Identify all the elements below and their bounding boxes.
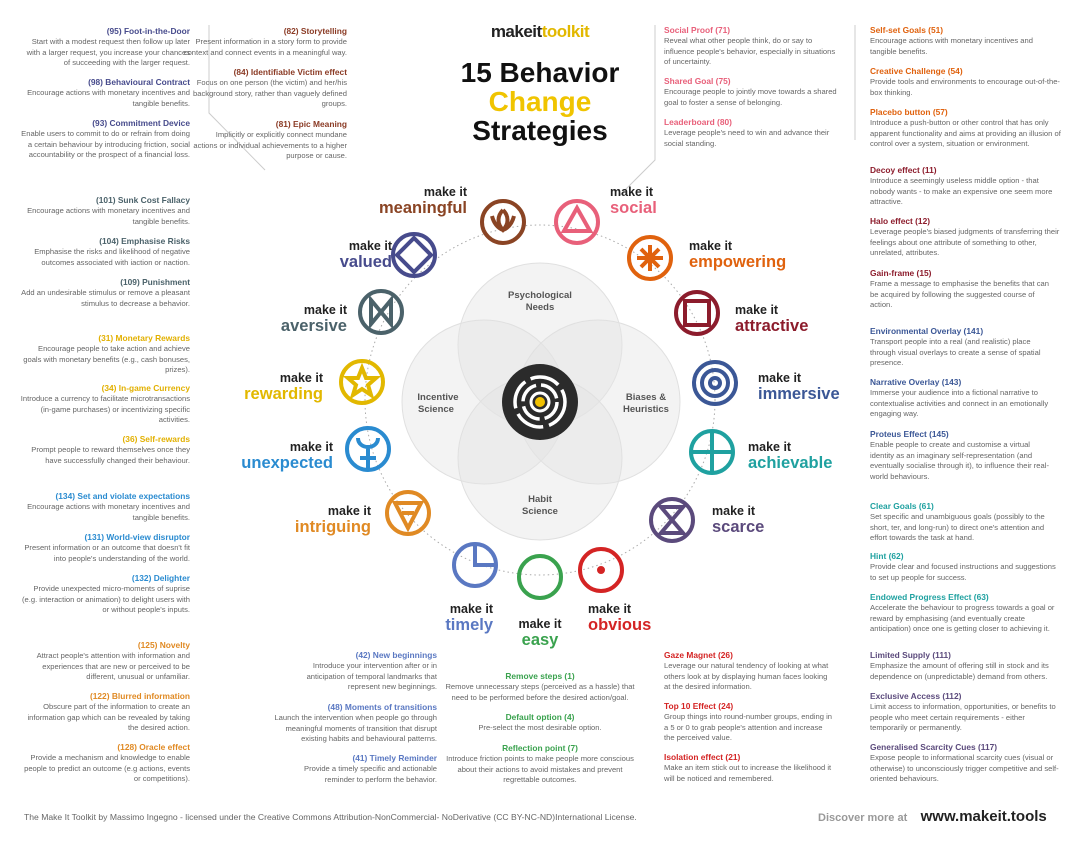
text: 34: Introduce a currency to facilitate microtransactions (in-game purchases) or incentivizing specific activities. [21, 394, 190, 424]
label: immersive: immersive [758, 384, 840, 402]
text: 12 [870, 216, 1065, 259]
label: easy: make it [518, 617, 562, 631]
label: obvious: obvious [588, 616, 651, 634]
label: achievable: make it [748, 440, 791, 454]
label: aversive [281, 303, 347, 334]
label: valued: valued [340, 252, 392, 270]
text: 112: Exclusive Access (112) [870, 691, 961, 701]
title: 15 Behavior [461, 57, 619, 88]
icon: intriguing [387, 492, 429, 534]
text: 41 [304, 753, 437, 784]
label: social [610, 185, 657, 216]
background ring, venn and icons: Habit [528, 494, 553, 505]
text: 71: Social Proof (71) [664, 25, 730, 35]
text: 54: Provide tools and environments to encourage out-of-the-box thinking. [870, 77, 1060, 97]
label: timely [445, 602, 493, 634]
label: easy [518, 617, 562, 648]
text: 141: Transport people into a real (and realistic) place through visual overlays to create a sense of spatial presence. [870, 337, 1041, 367]
text: 63: Accelerate the behaviour to progress towards a goal or reward by emphasising (and eventually create anticipation) once one is getting closer to achieving it. [870, 603, 1054, 633]
label: valued [340, 239, 392, 270]
text: 109: Add an undesirable stimulus or remove a pleasant stimulus to decrease a behavior. [21, 288, 190, 308]
text: 84: Focus on one person (the victim) and her/his background story, rather than vaguely defined groups. [193, 78, 347, 108]
text: 7 [440, 743, 640, 786]
text: 95: Start with a modest request then follow up later with a larger request, you increase your chances of succeeding with the larger request. [27, 37, 190, 67]
text: 62: Hint (62) [870, 551, 904, 561]
background ring, venn and icons: Incentive [417, 392, 459, 403]
text: 143: Narrative Overlay (143) [870, 377, 961, 387]
text: 143: Immerse your audience into a fictional narrative to contextualise activities and connect in an emotionally engaging way. [870, 388, 1048, 418]
text: 41: (41) Timely Reminder [352, 753, 437, 763]
icon: aversive [360, 291, 402, 333]
text: 145: Enable people to create and customise a virtual identity as an imaginary self-representation (and eventually socialise through it), to influence their real-world behaviours. [870, 440, 1049, 481]
text: 57 [870, 107, 1065, 150]
icon: obvious [580, 549, 622, 591]
text: 51 [870, 25, 1060, 57]
icon: scarce [651, 499, 693, 541]
title: Change [489, 86, 591, 117]
center maze icon [502, 364, 578, 440]
text: 4: Pre-select the most desirable option. [478, 723, 602, 732]
icon: valued [393, 234, 435, 276]
title [461, 57, 619, 146]
text: 4 [478, 712, 602, 732]
text: 101: Encourage actions with monetary incentives and tangible benefits. [27, 206, 190, 226]
text: 11 [870, 165, 1055, 208]
text: 128: Provide a mechanism and knowledge to enable people to predict an outcome (e.g actions, events or competitions). [24, 753, 190, 783]
logo: makeittoolkit [491, 22, 589, 41]
text: 51: Self-set Goals (51) [870, 25, 943, 35]
text: 48: Launch the intervention when people go through meaningful moments of transition that disrupt existing habits and behavioural patterns. [274, 713, 437, 743]
text: 54: Creative Challenge (54) [870, 66, 963, 76]
text: 98 [27, 77, 190, 108]
label: social: social [610, 198, 657, 216]
text: 82 [184, 26, 347, 57]
icon: easy [519, 556, 561, 598]
text: 95: (95) Foot-in-the-Door [107, 26, 190, 36]
text: 80 [664, 117, 839, 149]
text: 57: Placebo button (57) [870, 107, 948, 117]
label: scarce: scarce [712, 518, 764, 536]
label: scarce [712, 504, 764, 536]
text: 75 [664, 76, 839, 108]
label: easy: easy [522, 630, 558, 648]
text: 24: Top 10 Effect (24) [664, 701, 733, 711]
text: 101: (101) Sunk Cost Fallacy [96, 195, 190, 205]
label: intriguing: intriguing [295, 518, 371, 536]
label: timely: make it [450, 602, 493, 616]
text: 71: Reveal what other people think, do or say to influence people's behavior, especially in situations of uncertainty. [664, 36, 835, 66]
text: 62: Provide clear and focused instructions and suggestions to set up people for success. [870, 562, 1056, 582]
icon: immersive [694, 362, 736, 404]
label: intriguing: make it [328, 504, 371, 518]
text: 111: Emphasize the amount of offering still in stock and its dependence on (unpredictable) demand from others. [870, 661, 1049, 681]
text: 26: Gaze Magnet (26) [664, 650, 733, 660]
text: 42: Introduce your intervention after or in anticipation of temporal landmarks that represent new beginnings. [307, 661, 437, 691]
label: achievable: achievable [748, 454, 832, 472]
footer license: The Make It Toolkit by Massimo Ingegno - licensed under the Creative Commons Attribution-NonCommercial- NoDerivative (CC BY-NC-ND)International License. [24, 812, 637, 822]
text: 81: (81) Epic Meaning [276, 119, 347, 129]
text: 1: Remove steps (1) [505, 671, 575, 681]
label: empowering: make it [689, 239, 732, 253]
label: achievable [748, 440, 832, 472]
text: 1: Remove unnecessary steps (perceived as a hassle) that need to be performed before the desired action/goal. [445, 682, 635, 702]
text: 111 [870, 650, 1055, 682]
text: 122: Obscure part of the information to create an information gap which can be revealed by taking the desired action. [27, 702, 190, 732]
label: obvious [588, 602, 651, 634]
text: 48: (48) Moments of transitions [328, 702, 437, 712]
text: 26 [664, 650, 834, 693]
text: 75: Shared Goal (75) [664, 76, 731, 86]
text: 104: (104) Emphasise Risks [99, 236, 190, 246]
label: rewarding: rewarding [244, 384, 323, 402]
label: meaningful: meaningful [379, 198, 467, 216]
title: Strategies [472, 115, 608, 146]
text: 131 [24, 532, 190, 563]
text: 82: (82) Storytelling [284, 26, 347, 36]
text: 93: (93) Commitment Device [92, 118, 190, 128]
venn: psychological needs [458, 263, 622, 427]
text: 42: (42) New beginnings [356, 650, 437, 660]
label: immersive: make it [758, 371, 801, 385]
label: rewarding: make it [280, 371, 323, 385]
text: 71 [664, 25, 839, 68]
text: 80: Leaderboard (80) [664, 117, 732, 127]
text: 63 [870, 592, 1060, 635]
text: 111: Limited Supply (111) [870, 650, 951, 660]
background ring, venn and icons: Biases & [626, 392, 666, 403]
text: 61 [870, 501, 1060, 544]
label: immersive [758, 371, 840, 402]
text: 7: Reflection point (7) [502, 743, 578, 753]
label: attractive: attractive [735, 316, 808, 334]
icon: social [556, 201, 598, 243]
text: 61: Clear Goals (61) [870, 501, 934, 511]
text: 132: (132) Delighter [132, 573, 190, 583]
text: 81: Implicitly or explicitly connect mundane actions or individual achievements to a higher purpose or cause. [193, 130, 347, 160]
text: 98: (98) Behavioural Contract [88, 77, 190, 87]
text: 134: (134) Set and violate expectations [55, 491, 190, 501]
background ring, venn and icons: Needs [526, 302, 554, 313]
text: 51: Encourage actions with monetary incentives and tangible benefits. [870, 36, 1033, 56]
footer link: Discover more at www.makeit.tools [818, 808, 1047, 825]
text: 34: (34) In-game Currency [102, 383, 190, 393]
text: 12: Leverage people's biased judgments of transferring their feelings about one attribute of something to other, unrelated, attributes. [870, 227, 1059, 257]
text: 62 [870, 551, 1060, 583]
text: 134 [27, 491, 190, 522]
venn: incentive science [402, 320, 566, 484]
text: 7: Introduce friction points to make people more conscious about their actions to avoid mistakes and prevent regrettable outcomes. [446, 754, 634, 784]
text: 21 [664, 752, 834, 784]
text: 21: Make an item stick out to increase the likelihood it will be noticed and remembered. [664, 763, 831, 783]
text: 98: Encourage actions with monetary incentives and tangible benefits. [27, 88, 190, 108]
text: 63: Endowed Progress Effect (63) [870, 592, 989, 602]
label: unexpected: unexpected [241, 454, 333, 472]
label: aversive: make it [304, 303, 347, 317]
text: 125: Attract people's attention with information and experiences that are new or perceived to be different, unusual or unfamiliar. [37, 651, 190, 681]
text: 84: (84) Identifiable Victim effect [234, 67, 347, 77]
text: 131: Present information or an outcome that doesn't fit into people's understanding of the world. [24, 543, 190, 563]
text: 61: Set specific and unambiguous goals (possibly to the short, ter, and long-run) to direct one's attention and effort towards the task at hand. [870, 512, 1045, 542]
text: 12: Halo effect (12) [870, 216, 930, 226]
text: 122: (122) Blurred information [90, 691, 190, 701]
text: 134: Encourage actions with monetary incentives and tangible benefits. [27, 502, 190, 522]
venn: biases heuristics [516, 320, 680, 484]
label: scarce: make it [712, 504, 755, 518]
label: unexpected [241, 440, 333, 472]
label: intriguing [295, 504, 371, 536]
icon: empowering [629, 237, 671, 279]
icon: attractive [676, 292, 718, 334]
text: 141: Environmental Overlay (141) [870, 326, 983, 336]
label: meaningful [379, 185, 467, 216]
background ring, venn and icons: Science [522, 506, 558, 517]
text: 24: Group things into round-number groups, ending in a 5 or 0 to grab people's attention and increase the perceived value. [664, 712, 832, 742]
label: meaningful: make it [424, 185, 467, 199]
text: 141 [870, 326, 1055, 369]
text: 36: Prompt people to reward themselves once they have successfully changed their behaviour. [31, 445, 190, 465]
label: empowering: empowering [689, 252, 786, 270]
label: obvious: make it [588, 602, 631, 616]
text: 36: (36) Self-rewards [122, 434, 190, 444]
text: 75: Encourage people to jointly move towards a shared goal to foster a sense of belonging. [664, 87, 837, 107]
text: 93: Enable users to commit to do or refrain from doing a certain behaviour by introducing friction, social accountability or the prospect of a financial loss. [21, 129, 190, 159]
background ring, venn and icons: Science [418, 404, 454, 415]
text: 26: Leverage our natural tendency of looking at what others look at by displaying human faces looking at the desired information. [664, 661, 828, 691]
icon: rewarding [341, 361, 383, 403]
text: 31: (31) Monetary Rewards [98, 333, 190, 343]
text: 125: (125) Novelty [138, 640, 190, 650]
text: 143 [870, 377, 1055, 420]
label: unexpected: make it [290, 440, 333, 454]
text: 54 [870, 66, 1060, 98]
text: 24 [664, 701, 834, 744]
icon: meaningful [482, 201, 524, 243]
text: 117: Expose people to informational scarcity cues (visual or otherwise) to unconsciously trigger competitive and self-oriented behaviours. [870, 753, 1059, 783]
text: 80: Leverage people's need to win and advance their social standing. [664, 128, 829, 148]
text: 15: Frame a message to emphasise the benefits that can be acquired by following the suggested course of action. [870, 279, 1049, 309]
text: 11: Introduce a seemingly useless middle option - that nobody wants - to make an expensive one seem more attractive. [870, 176, 1052, 206]
icon: unexpected [347, 428, 389, 470]
label: social: make it [610, 185, 653, 199]
text: 36 [31, 434, 190, 465]
text: 132: Provide unexpected micro-moments of suprise (e.g. interaction or animation) to delight users with or without people's inputs. [22, 584, 190, 614]
text: 4: Default option (4) [506, 712, 574, 722]
text: 104: Emphasise the risks and likelihood of negative outcomes associated with iaction or naction. [34, 247, 190, 267]
text: 15: Gain-frame (15) [870, 268, 931, 278]
text: 41: Provide a timely specific and actionable reminder to perform the behavior. [304, 764, 437, 784]
text: 109: (109) Punishment [120, 277, 190, 287]
text: 117: Generalised Scarcity Cues (117) [870, 742, 997, 752]
icon: timely [454, 544, 496, 586]
text: 15 [870, 268, 1055, 311]
text: 21: Isolation effect (21) [664, 752, 740, 762]
text: 101 [27, 195, 190, 226]
label: valued: make it [349, 239, 392, 253]
text: 11: Decoy effect (11) [870, 165, 937, 175]
label: rewarding [244, 371, 323, 402]
text: 145: Proteus Effect (145) [870, 429, 949, 439]
text: 112: Limit access to information, opportunities, or benefits to people who meet certain requirements - either temporarily or permanently. [870, 702, 1056, 732]
text: 57: Introduce a push-button or other control that has only apparent functionality and aims at providing an illusion of control over a system, situation or environment. [870, 118, 1061, 148]
background ring, venn and icons: Heuristics [623, 404, 669, 415]
text: 128: (128) Oracle effect [117, 742, 190, 752]
text: 112 [870, 691, 1060, 734]
label: aversive: aversive [281, 316, 347, 334]
text: 31: Encourage people to take action and achieve goals with monetary benefits (e.g., cash bonuses, prizes). [23, 344, 190, 374]
venn: habit science [458, 376, 622, 540]
label: attractive [735, 303, 808, 334]
text: 104 [34, 236, 190, 267]
text: 1 [445, 671, 635, 702]
label: empowering [689, 239, 786, 270]
icon: achievable [691, 431, 733, 473]
background ring, venn and icons: Psychological [508, 290, 572, 301]
text: 82: Present information in a story form to provide context and connect events in a meaningful way. [184, 37, 347, 57]
label: attractive: make it [735, 303, 778, 317]
text: 109 [21, 277, 190, 308]
label: timely: timely [445, 616, 493, 634]
text: 131: (131) World-view disruptor [85, 532, 190, 542]
